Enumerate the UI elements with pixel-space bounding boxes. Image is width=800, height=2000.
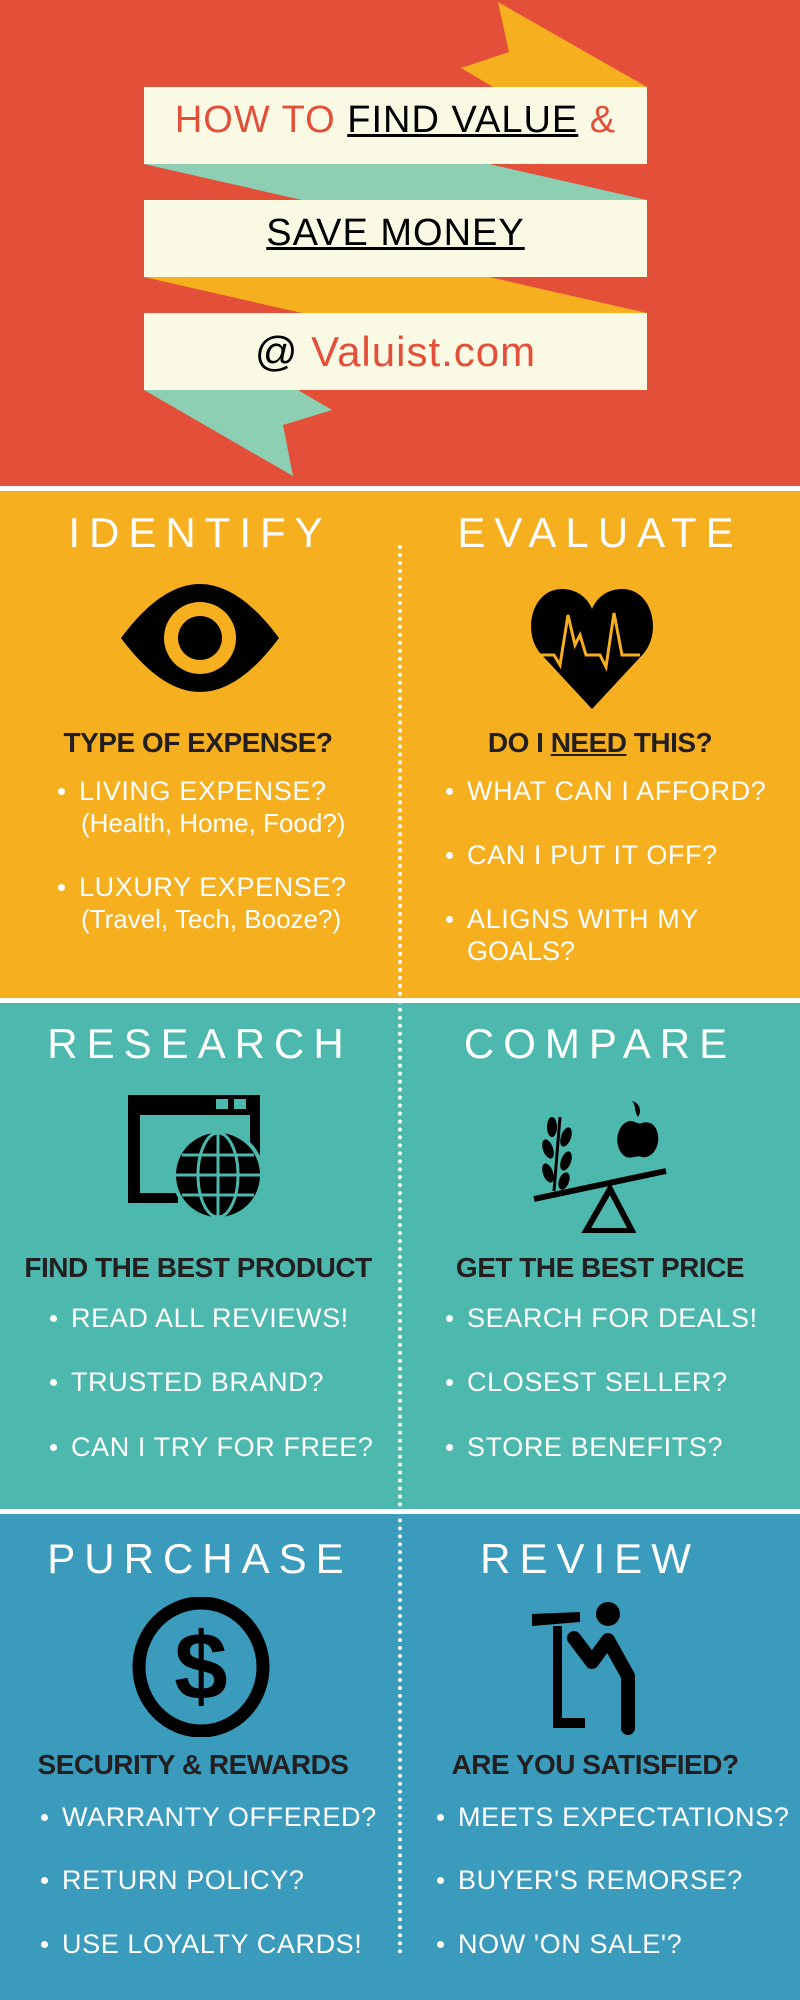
icon: person with telescope (532, 1602, 635, 1735)
subheading: find the best product: FIND THE BEST PRODUCT (24, 1252, 372, 1283)
title banner 1: HOW TO FIND VALUE & (175, 99, 616, 141)
text: STORE BENEFITS? (467, 1432, 723, 1462)
header panel (0, 0, 800, 486)
text: NOW 'ON SALE'? (458, 1929, 682, 1959)
title banner 2: SAVE MONEY (266, 212, 525, 254)
text: CAN I TRY FOR FREE? (71, 1432, 373, 1462)
title banner 3 (144, 313, 647, 390)
text: READ ALL REVIEWS! (71, 1303, 349, 1333)
icon: dollar coin (132, 1597, 270, 1737)
icon: browser globe (128, 1095, 260, 1217)
icon: dollar coin: $ (174, 1613, 228, 1720)
heading: review: REVIEW (480, 1535, 700, 1582)
text: LIVING EXPENSE? (79, 776, 327, 806)
title banner 1 (144, 87, 647, 164)
heading: compare: COMPARE (464, 1020, 736, 1067)
icon: heart (531, 589, 653, 709)
subheading: are you satisfied: ARE YOU SATISFIED? (451, 1749, 739, 1780)
panel: purchase/review (0, 1514, 800, 2000)
dotted divider (398, 545, 402, 1955)
text: (Health, Home, Food?) (81, 808, 345, 838)
bullets: evaluate (446, 776, 766, 966)
text: CLOSEST SELLER? (467, 1367, 728, 1397)
ribbon shapes (144, 2, 647, 476)
text: CAN I PUT IT OFF? (467, 840, 718, 870)
heading: identify: IDENTIFY (68, 509, 332, 556)
bullets: research (50, 1303, 373, 1462)
heading: evaluate: EVALUATE (457, 509, 743, 556)
bullets: review (437, 1802, 789, 1959)
subheading: do i need this: DO I NEED THIS? (488, 727, 712, 758)
title banner 3: @ Valuist.com (255, 328, 536, 375)
panel: identify/evaluate (0, 491, 800, 998)
text: RETURN POLICY? (62, 1865, 304, 1895)
panel: research/compare (0, 1003, 800, 1509)
text: LUXURY EXPENSE? (79, 872, 347, 902)
text: MEETS EXPECTATIONS? (458, 1802, 789, 1832)
heading: research: RESEARCH (47, 1020, 353, 1067)
icon: seesaw (533, 1101, 667, 1233)
text: SEARCH FOR DEALS! (467, 1303, 758, 1333)
bullets: purchase (41, 1802, 377, 1959)
text: GOALS? (467, 936, 575, 966)
text: ALIGNS WITH MY (467, 904, 699, 934)
bullets: identify (58, 776, 347, 934)
subheading: get the best price: GET THE BEST PRICE (456, 1252, 744, 1283)
text: BUYER'S REMORSE? (458, 1865, 743, 1895)
text: WARRANTY OFFERED? (62, 1802, 377, 1832)
text: (Travel, Tech, Booze?) (81, 904, 341, 934)
text: USE LOYALTY CARDS! (62, 1929, 362, 1959)
heading: purchase: PURCHASE (47, 1535, 353, 1582)
bullets: compare (446, 1303, 758, 1462)
icon: eye (121, 584, 279, 692)
title banner 2 (144, 200, 647, 277)
text: WHAT CAN I AFFORD? (467, 776, 766, 806)
subheading: security & rewards: SECURITY & REWARDS (38, 1749, 348, 1780)
text: TRUSTED BRAND? (71, 1367, 324, 1397)
subheading: type of expense: TYPE OF EXPENSE? (64, 727, 332, 758)
